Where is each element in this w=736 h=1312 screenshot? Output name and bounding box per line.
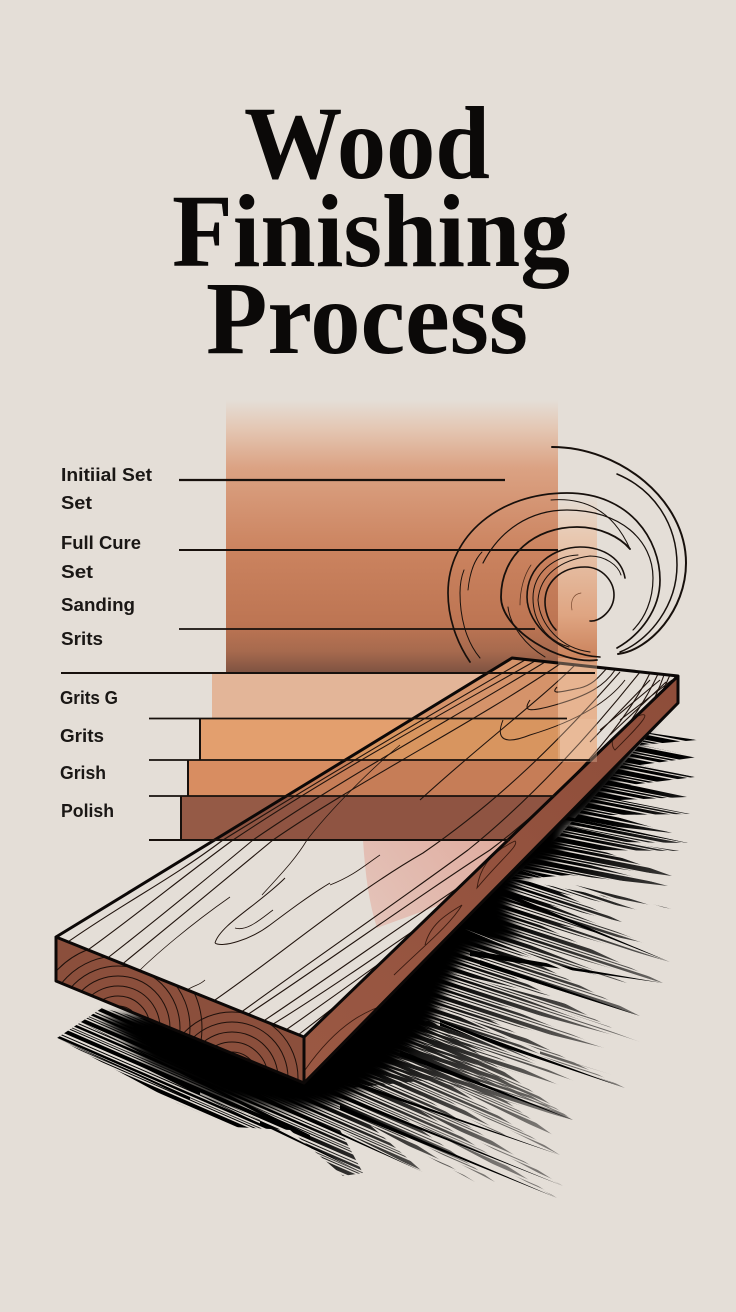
title: Wood xyxy=(244,86,490,201)
shadow: solid core xyxy=(100,728,655,1110)
step labels xyxy=(60,464,152,821)
panel: finish colour column xyxy=(212,400,597,762)
leader lines xyxy=(61,480,595,840)
step labels: Grits xyxy=(60,725,104,746)
step labels: Full Cure xyxy=(61,532,141,553)
step labels: Grits G xyxy=(60,687,118,708)
title: Process xyxy=(206,261,528,376)
panel: colour steps xyxy=(181,719,560,840)
step labels: Set xyxy=(61,561,93,582)
growth ring spiral xyxy=(448,447,686,662)
board: end grain face xyxy=(58,939,302,1081)
board: wood grain lines xyxy=(65,660,675,1035)
step labels: Grish xyxy=(60,762,106,783)
second column overlay xyxy=(558,658,597,762)
title xyxy=(172,86,570,376)
infographic canvas xyxy=(54,106,696,1198)
step labels: Srits xyxy=(61,628,103,649)
step labels: Set xyxy=(61,492,92,513)
shadow: brush streaks under board xyxy=(57,728,698,1198)
shadow: fine streak tips xyxy=(57,815,688,1198)
board: top face xyxy=(68,660,675,1036)
step labels: Sanding xyxy=(61,594,135,615)
step labels: Initiial Set xyxy=(61,464,152,485)
title: Finishing xyxy=(172,174,570,289)
step labels: Polish xyxy=(61,800,114,821)
wood board xyxy=(54,656,680,1084)
board: long side face xyxy=(304,676,678,1083)
board: outline xyxy=(56,658,678,1083)
shadow: light gaps between streaks xyxy=(430,825,680,1085)
